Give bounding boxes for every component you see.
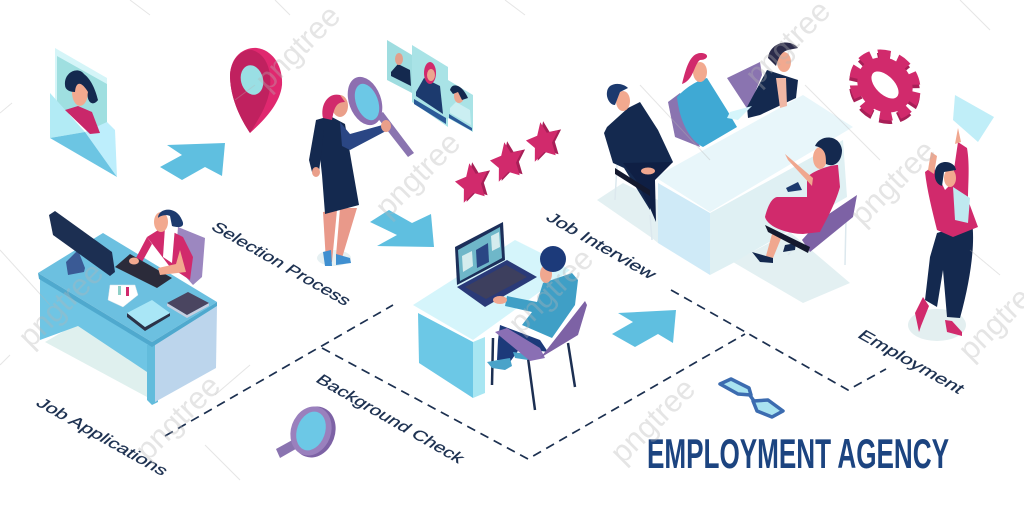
- watermarks: pngtree: [368, 125, 467, 224]
- watermarks: pngtree: [11, 255, 110, 354]
- icon: envelope with portrait: [50, 48, 117, 177]
- label: Job Applications: Job Applications: [32, 395, 172, 479]
- watermarks: pngtree: [128, 368, 227, 467]
- desk with job applicant: [38, 210, 217, 405]
- arrow 3: [612, 310, 676, 347]
- icon: small magnifier: [276, 400, 343, 464]
- meeting table scene: [597, 43, 857, 303]
- label: Job Interview: Job Interview: [542, 210, 660, 282]
- watermarks: pngtree: [843, 133, 942, 232]
- icon: rating stars: [453, 116, 564, 205]
- label: Background Check: Background Check: [312, 372, 469, 467]
- watermarks: pngtree: [501, 241, 600, 340]
- icon: location pin: [230, 48, 282, 133]
- icon: glasses: [720, 379, 783, 417]
- label: Employment: Employment: [854, 327, 969, 397]
- label: Selection Process: Selection Process: [207, 219, 355, 309]
- employed woman with paper: [908, 95, 994, 341]
- icon: gear: [840, 42, 930, 132]
- arrow 1: [160, 143, 225, 180]
- icon: candidate cards: [387, 40, 473, 132]
- arrow 2: [370, 210, 434, 247]
- watermarks: pngtree: [248, 0, 347, 97]
- watermarks: pngtree: [603, 371, 702, 470]
- dashed connector lines: [165, 290, 886, 459]
- laptop desk with man: [413, 222, 587, 410]
- woman with magnifying glass: [309, 72, 414, 266]
